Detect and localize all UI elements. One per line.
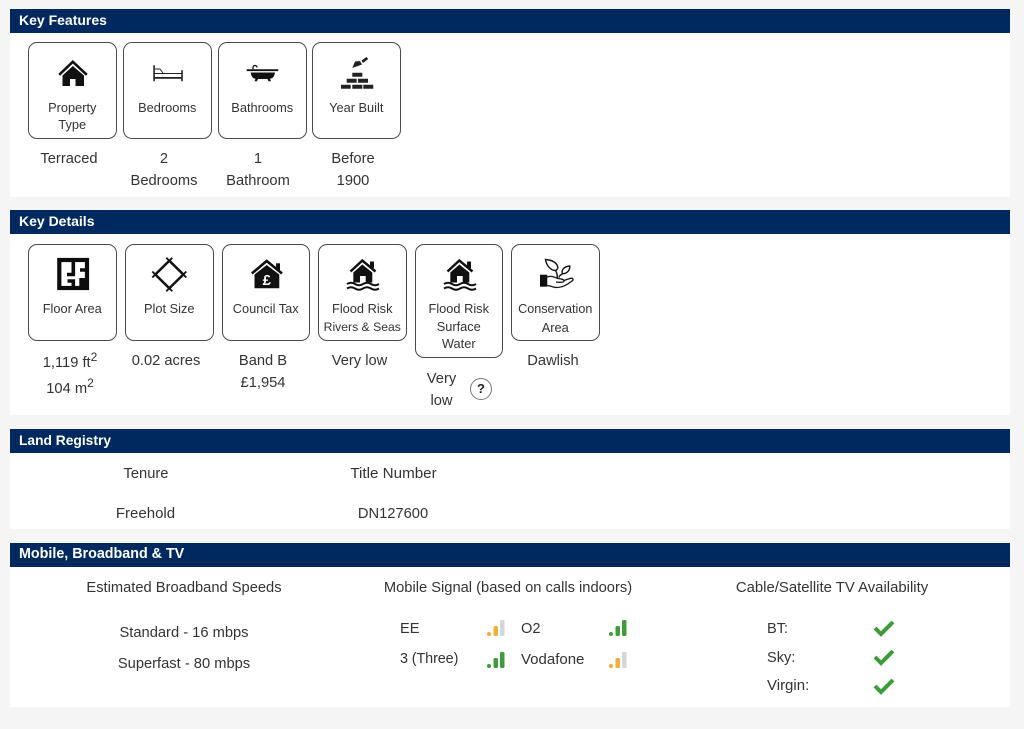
label: Floor Area — [43, 301, 102, 316]
value: floor area: 104 m2 — [46, 376, 94, 396]
icon: floor plan — [57, 258, 90, 290]
value: bedrooms — [131, 151, 197, 189]
label — [518, 302, 592, 334]
card: bedrooms — [123, 42, 212, 138]
panel: land registry — [10, 429, 1010, 529]
value: surface water risk: low — [430, 393, 453, 409]
label: title number: Title Number — [350, 465, 437, 482]
icon: council tax house: £ — [262, 272, 271, 289]
icon: bath — [246, 64, 278, 82]
heading: mobile broadband and tv — [10, 543, 1010, 567]
value: bathroom: Bathroom — [226, 173, 290, 189]
value: rivers and seas risk: Very low — [332, 353, 387, 369]
label: Surface — [437, 318, 481, 334]
icon: bricks and trowel — [341, 57, 374, 89]
label — [48, 100, 96, 132]
heading: land registry — [10, 429, 1010, 453]
label: O2: O2 — [521, 621, 540, 637]
label: Flood Risk — [429, 301, 489, 316]
card: property type — [28, 42, 116, 138]
value: council tax: Band B — [239, 353, 287, 369]
label: Bedrooms — [138, 100, 196, 114]
card: year built — [312, 42, 400, 138]
value: bedrooms: Bedrooms — [131, 173, 197, 189]
value: conservation area: Dawlish — [527, 353, 579, 369]
value: terraced: Terraced — [40, 151, 98, 167]
value: standard speed: Standard - 16 mbps — [120, 625, 248, 641]
label — [429, 301, 489, 351]
value: bathroom — [226, 151, 290, 189]
value: surface water risk: Very — [427, 371, 456, 387]
value: council tax: £1,954 — [241, 375, 285, 391]
label: vodafone: Vodafone — [521, 651, 584, 668]
value: title number: DN127600 — [358, 506, 428, 522]
icon: BT tick — [874, 620, 894, 637]
label: virgin: Virgin: — [767, 677, 809, 694]
value: before 1900: 1900 — [337, 173, 369, 189]
value: superfast speed: Superfast - 80 mbps — [118, 656, 250, 672]
value: surface water risk — [426, 371, 456, 409]
value: bathroom: 1 — [254, 151, 262, 167]
heading: mobile broadband and tv: Mobile, Broadband & TV — [19, 546, 184, 562]
label: Bathrooms — [231, 100, 293, 114]
label: Water — [442, 336, 476, 351]
label: Conservation — [518, 302, 592, 316]
label: Flood Risk — [332, 301, 392, 316]
icon: virgin tick — [874, 678, 894, 695]
label: tenure: Tenure — [124, 466, 168, 482]
value: freehold: Freehold — [116, 505, 175, 522]
card: plot size — [125, 244, 214, 340]
panel: key details — [10, 210, 1010, 415]
icon: flooded house — [444, 258, 476, 291]
value: floor area: 1,119 ft2 — [43, 350, 97, 371]
heading: tv availability: Cable/Satellite TV Availability — [736, 580, 928, 596]
icon: plot diamond — [152, 257, 187, 292]
signal bars: three — [487, 652, 504, 668]
heading: key details: Key Details — [19, 213, 94, 229]
panel: key features — [10, 9, 1010, 197]
heading: key features: Key Features — [19, 12, 107, 28]
label: BT: BT: — [767, 621, 788, 637]
icon: help badge: ? — [477, 381, 485, 396]
icon: hand with plant — [540, 258, 574, 288]
icon: flooded house — [346, 258, 380, 291]
signal bars: vodafone — [609, 652, 626, 668]
icon: bed — [153, 65, 183, 82]
label: sky: Sky: — [767, 650, 795, 666]
panel: mobile broadband and tv — [10, 543, 1010, 707]
heading: land registry: Land Registry — [19, 433, 111, 448]
label: EE: EE — [400, 621, 419, 637]
card: flood risk rivers and seas — [318, 244, 406, 340]
label — [324, 301, 401, 334]
value: before 1900 — [331, 151, 375, 189]
icon: house — [58, 60, 88, 86]
label: Property — [48, 100, 96, 114]
icon: help badge — [470, 378, 492, 400]
signal bars: EE — [487, 620, 504, 636]
label: Area — [542, 320, 569, 334]
label: Type — [58, 117, 86, 132]
card: flood risk surface water — [414, 244, 503, 358]
label: Plot Size — [144, 301, 194, 316]
card: council tax — [222, 244, 310, 340]
heading: broadband speeds: Estimated Broadband Speeds — [86, 580, 282, 596]
icon: sky tick — [874, 650, 894, 666]
value: bedrooms: 2 — [160, 151, 168, 167]
value: council tax — [239, 353, 287, 391]
value: before 1900: Before — [331, 151, 375, 167]
label: Year Built — [329, 100, 383, 114]
heading: mobile signal: Mobile Signal (based on calls indoors) — [384, 580, 632, 596]
heading: key features — [10, 9, 1010, 33]
card: bathrooms — [218, 42, 306, 138]
card: conservation area — [511, 244, 600, 340]
value: floor area — [43, 350, 97, 396]
label: Council Tax — [233, 301, 299, 316]
label: three: 3 (Three) — [400, 651, 458, 667]
icon: council tax house — [251, 259, 283, 289]
value: plot size: 0.02 acres — [132, 353, 200, 369]
label: Rivers & Seas — [324, 320, 401, 334]
signal bars: O2 — [609, 620, 626, 636]
heading: key details — [10, 210, 1010, 234]
card: floor area — [28, 244, 116, 340]
